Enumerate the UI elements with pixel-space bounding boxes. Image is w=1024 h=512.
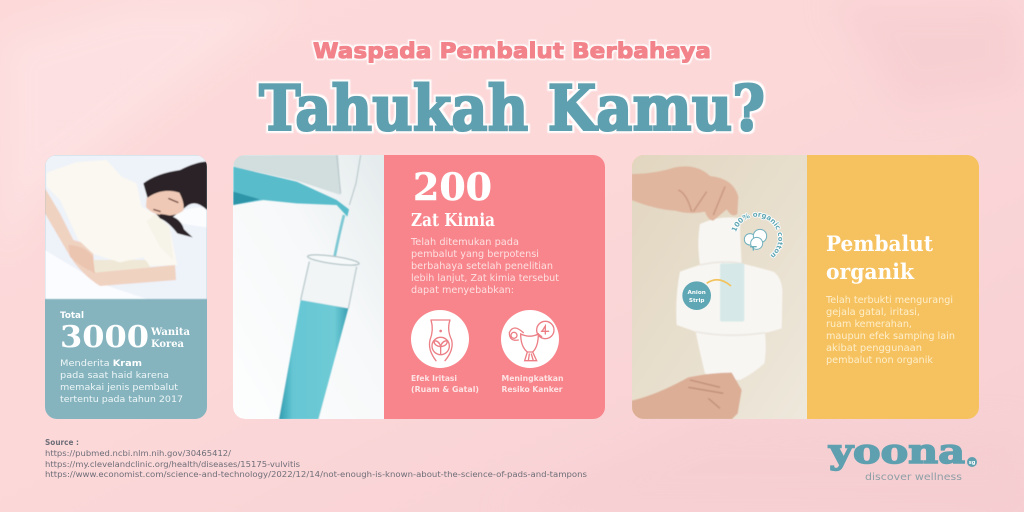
description: pada saat haid karena (60, 370, 169, 381)
paragraph: dapat menyebabkan: (411, 285, 514, 296)
paragraph: pembalut yang berpotensi (411, 249, 539, 260)
logo: yoona: discover wellness (865, 472, 962, 483)
icon labels: (Ruam & Gatal) (411, 385, 479, 394)
description: memakai jenis pembalut (60, 382, 178, 393)
logo: yoona: sg (969, 460, 976, 466)
stat text: Total (60, 311, 84, 321)
icon: cancer risk (501, 310, 559, 368)
logo: yoona: yoona (828, 432, 965, 472)
stat text: 3000 (60, 320, 149, 355)
heading: Pembalut organik: Pembalut (826, 232, 933, 257)
paragraph (410, 237, 559, 296)
stat text: Wanita (150, 327, 191, 338)
badge: 100% organic cotton: 100% organic cotton (731, 212, 784, 258)
photo: organic pad held by two hands (632, 155, 807, 419)
heading: 200 Zat Kimia: 200 (413, 165, 492, 209)
paragraph: gejala gatal, iritasi, (826, 307, 920, 318)
heading: 200 Zat Kimia: Zat Kimia (411, 211, 495, 231)
paragraph: Telah ditemukan pada (410, 237, 519, 248)
heading: 200 Zat Kimia (411, 165, 495, 231)
label: anion strip (682, 280, 731, 310)
label: anion strip: Strip (689, 298, 704, 304)
paragraph: pembalut non organik (826, 355, 933, 366)
paragraph: Telah terbukti mengurangi (825, 295, 953, 306)
paragraph: ruam kemerahan, (826, 319, 912, 330)
paragraph (825, 295, 955, 366)
icon: irritation (411, 310, 469, 368)
paragraph: maupun efek samping lain (826, 331, 955, 342)
description: tertentu pada tahun 2017 (60, 394, 183, 405)
sources: https://pubmed.ncbi.nlm.nih.gov/30465412/ (45, 449, 231, 458)
paragraph: lebih lanjut, Zat kimia tersebut (411, 273, 559, 284)
panel: 3000 women (45, 155, 207, 419)
label: anion strip: Anion (688, 290, 706, 296)
paragraph: akibat penggunaan (826, 343, 922, 354)
panel: 200 chemicals (233, 155, 605, 419)
title: Tahukah Kamu? (259, 71, 765, 145)
photo: woman with cramps (45, 155, 207, 299)
subtitle: Waspada Pembalut Berbahaya (313, 39, 711, 63)
icon labels: Meningkatkan (502, 374, 564, 383)
paragraph: berbahaya setelah penelitian (411, 261, 553, 272)
stat text: Korea (151, 339, 185, 350)
sources: Source : (45, 438, 79, 447)
icon labels: Efek Iritasi (411, 374, 457, 383)
heading: Pembalut organik: organik (826, 260, 915, 285)
icon labels: Resiko Kanker (502, 385, 563, 394)
sources: https://www.economist.com/science-and-technology/2022/12/14/not-enough-is-known-about-the-science-of-pads-and-tampons (45, 470, 587, 479)
heading: Pembalut organik (826, 232, 933, 285)
description (60, 358, 183, 405)
photo: beaker and test tube (233, 155, 384, 419)
logo: yoona (828, 432, 977, 483)
description: Menderita Kram (60, 358, 142, 369)
stat text (60, 311, 191, 355)
panel: organic pads (632, 155, 979, 419)
sources (45, 438, 587, 479)
sources: https://my.clevelandclinic.org/health/diseases/15175-vulvitis (45, 460, 300, 469)
icon labels (411, 374, 564, 394)
